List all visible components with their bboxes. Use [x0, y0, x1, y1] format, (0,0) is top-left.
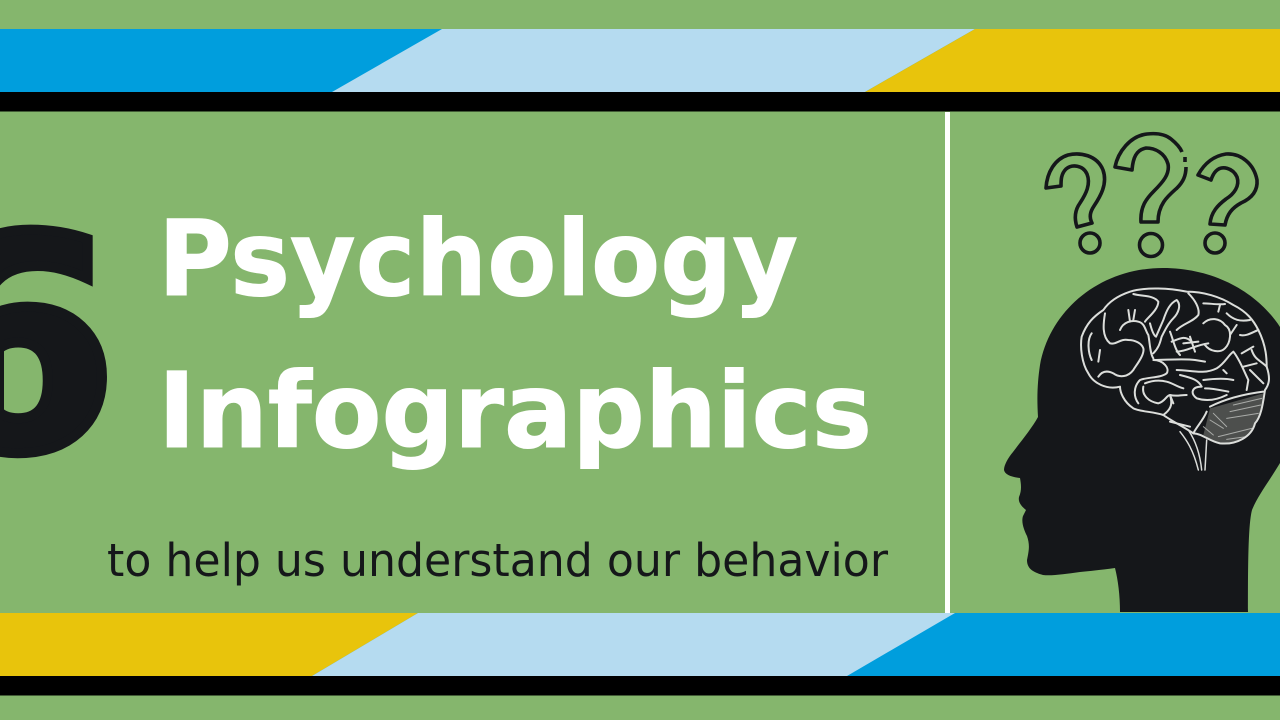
icon: right question mark [1198, 154, 1257, 253]
icon: head silhouette [1004, 268, 1280, 612]
top stripe band [0, 29, 1280, 112]
icon: question marks [1046, 134, 1257, 256]
title line 1: Psychology [158, 198, 798, 320]
brain stem [1180, 430, 1207, 470]
icon: left question mark [1046, 154, 1105, 253]
title line 2: Infographics [158, 350, 872, 472]
cerebellum [1203, 393, 1263, 444]
icon: middle question mark [1115, 134, 1186, 256]
subtitle: to help us understand our behavior [107, 534, 888, 587]
icon: brain [1081, 289, 1269, 470]
vertical divider [945, 112, 950, 613]
brain outline [1081, 289, 1269, 444]
brain folds [1089, 293, 1267, 433]
bottom stripe band [0, 613, 1280, 696]
